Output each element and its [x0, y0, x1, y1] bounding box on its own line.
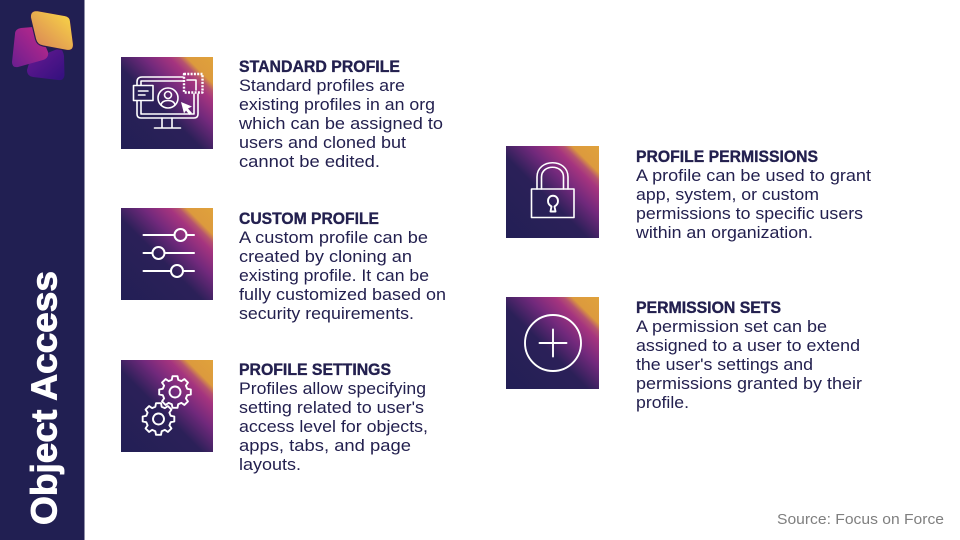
icon: profile permissions padlock — [506, 146, 599, 238]
logo — [12, 10, 74, 80]
icon: permission sets plus — [506, 297, 599, 389]
sidebar — [0, 0, 84, 540]
text: permission sets — [636, 299, 862, 412]
text: custom profile: security requirements. — [239, 304, 414, 323]
text: profile settings: setting related to user's — [239, 398, 424, 417]
text: custom profile: existing profile. It can be — [239, 266, 429, 285]
sidebar title: Object Access — [24, 271, 64, 525]
text: custom profile: created by cloning an — [239, 247, 412, 266]
text: custom profile: fully customized based on — [239, 285, 446, 304]
text: standard profile — [238, 58, 443, 171]
text: permission sets: A permission set can be — [636, 317, 827, 336]
text: custom profile: A custom profile can be — [239, 228, 428, 247]
text: profile settings: apps, tabs, and page — [239, 436, 411, 455]
icon: custom profile sliders — [121, 208, 213, 300]
text: standard profile: Standard profiles are — [239, 76, 405, 95]
text: permission sets: the user's settings and — [636, 355, 813, 374]
text: profile permissions: app, system, or custom — [636, 185, 819, 204]
text: profile settings: PROFILE SETTINGS — [239, 361, 391, 379]
text: standard profile: STANDARD PROFILE — [239, 58, 400, 76]
icon: standard profile monitor — [121, 57, 213, 149]
text: profile permissions — [635, 148, 871, 242]
text: standard profile: cannot be edited. — [239, 152, 380, 171]
text: profile settings: Profiles allow specifying — [239, 379, 426, 398]
text: profile permissions: permissions to specific users — [636, 204, 863, 223]
text: permission sets: PERMISSION SETS — [636, 299, 781, 317]
text: profile permissions: within an organization. — [635, 223, 813, 242]
text: custom profile — [239, 210, 446, 323]
source credit: Source: Focus on Force — [777, 511, 944, 528]
text: permission sets: assigned to a user to extend — [636, 336, 860, 355]
icon: profile settings gears — [121, 360, 213, 452]
text: permission sets: permissions granted by their — [636, 374, 862, 393]
text: standard profile: users and cloned but — [239, 133, 406, 152]
text: standard profile: existing profiles in an org — [239, 95, 435, 114]
text: profile settings: layouts. — [239, 455, 301, 474]
text: profile permissions: PROFILE PERMISSIONS — [636, 148, 818, 166]
text: standard profile: which can be assigned to — [238, 114, 443, 133]
text: permission sets: profile. — [636, 393, 689, 412]
text: profile settings: access level for objects, — [239, 417, 428, 436]
text: profile settings — [239, 361, 428, 474]
text: custom profile: CUSTOM PROFILE — [239, 210, 379, 228]
text: profile permissions: A profile can be used to grant — [636, 166, 871, 185]
